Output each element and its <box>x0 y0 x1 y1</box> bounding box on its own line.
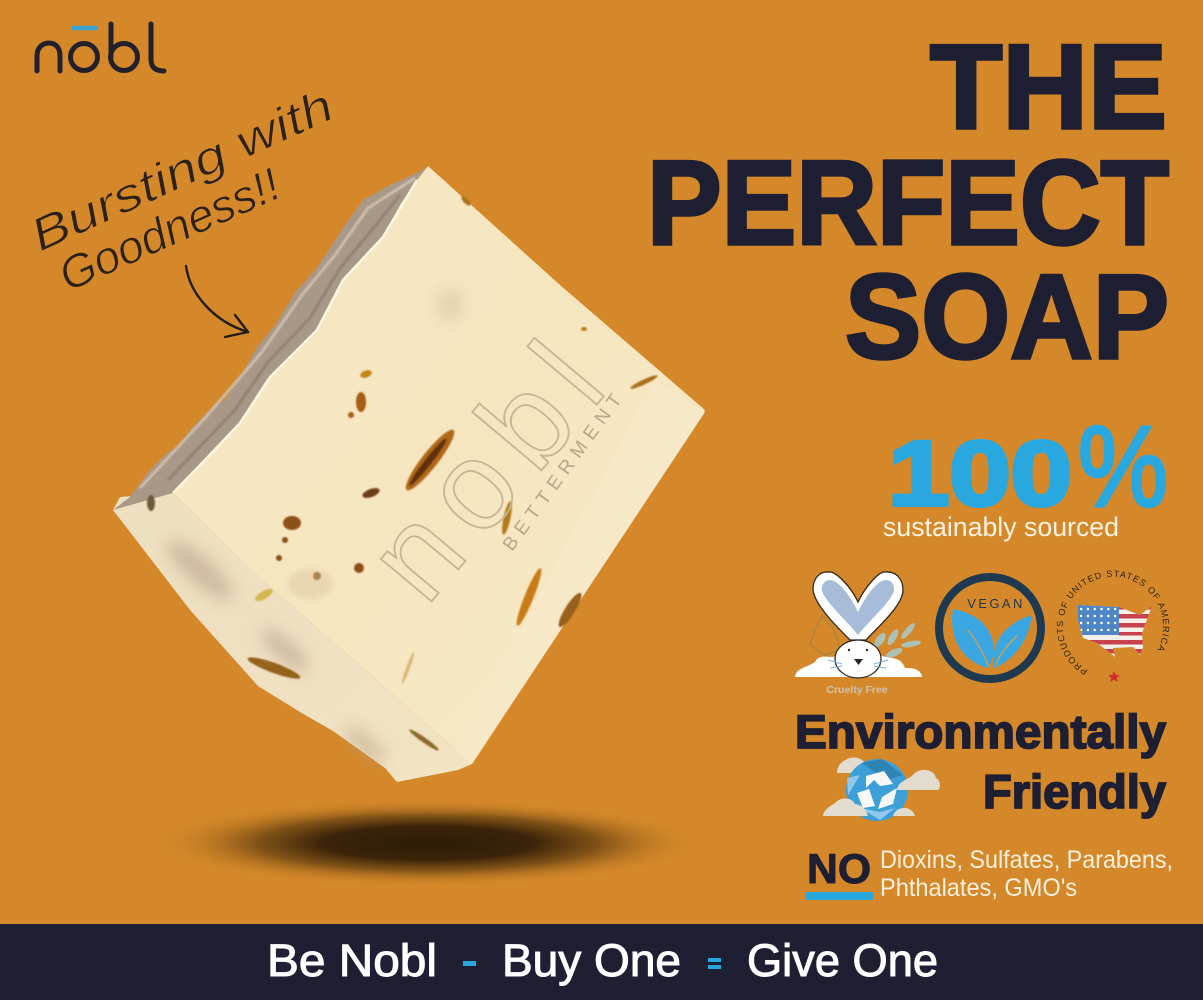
list of excluded ingredients: Dioxins, Sulfates, Parabens, <box>880 846 1173 874</box>
badge: vegan <box>939 577 1041 679</box>
soap top face <box>173 166 705 764</box>
Friendly heading: Friendly <box>983 765 1166 818</box>
list of excluded ingredients: Phthalates, GMO's <box>880 874 1077 902</box>
banner slogan: Be Nobl <box>267 935 437 986</box>
rough bark edge <box>113 167 427 510</box>
title: THE PERFECT SOAP: SOAP <box>845 250 1169 384</box>
cruelty free label: Cruelty Free <box>826 684 888 696</box>
left leaf <box>952 609 994 668</box>
pale edge of top face <box>173 180 417 493</box>
inner ears <box>822 580 894 635</box>
floor shadow <box>55 782 755 902</box>
list of excluded ingredients <box>880 846 1173 902</box>
right slab <box>455 380 705 764</box>
back clouds <box>837 757 872 773</box>
100% stat: 100 <box>888 423 1072 525</box>
handwritten callout: Bursting with Goodness: Bursting with <box>23 79 341 261</box>
rabbit ears <box>813 572 903 640</box>
right leaf <box>993 615 1032 668</box>
leaves <box>872 621 921 660</box>
rabbit eyes <box>848 649 868 651</box>
red star <box>1108 671 1120 682</box>
icon: recycling globe with clouds <box>823 757 940 821</box>
handwritten callout: Bursting with Goodness <box>23 79 341 301</box>
leaf veins <box>968 630 1017 666</box>
sustainably sourced caption: sustainably sourced <box>883 512 1119 542</box>
front clouds <box>823 770 940 816</box>
equals sign <box>708 958 721 969</box>
snow base <box>795 655 922 677</box>
nobl logo <box>37 24 164 71</box>
bottom banner <box>0 924 1203 1000</box>
100% stat: % <box>1078 404 1168 531</box>
NO label with underline: NO <box>807 845 871 892</box>
Environmentally heading: Environmentally <box>795 705 1166 758</box>
lower side smudges <box>160 289 462 768</box>
100% stat <box>883 404 1168 542</box>
whiskers <box>828 660 888 668</box>
title: THE PERFECT SOAP: PERFECT <box>647 136 1169 270</box>
ring text: PRODUCTS OF UNITED STATES OF AMERICA <box>1056 570 1170 675</box>
banner slogan: Give One <box>747 935 938 986</box>
embossed nobl mark: nobl <box>340 318 630 625</box>
badge: products of USA <box>1056 570 1170 682</box>
rabbit nose <box>854 659 863 665</box>
map of USA flag <box>1078 605 1152 657</box>
banner slogan: Buy One <box>502 935 681 986</box>
banner slogan <box>267 935 938 986</box>
rabbit head <box>835 640 881 678</box>
title: THE PERFECT SOAP <box>647 20 1169 384</box>
flecks of calendula <box>147 195 659 752</box>
recycle symbol <box>857 771 897 809</box>
lower side face <box>113 493 472 782</box>
bark light streaks <box>140 178 415 488</box>
bark dark streaks <box>168 195 400 480</box>
handwritten callout: Bursting with Goodness: Goodness!! <box>51 158 288 301</box>
vegan label: VEGAN <box>967 596 1025 611</box>
title: THE PERFECT SOAP: THE <box>930 20 1167 154</box>
embossed BETTERMENT: BETTERMENT <box>499 390 627 555</box>
oak leaf <box>810 615 840 655</box>
arrow to soap <box>186 266 248 337</box>
badge: cruelty free rabbit <box>795 572 922 696</box>
minus sign <box>463 961 476 966</box>
soap bar <box>113 166 705 782</box>
